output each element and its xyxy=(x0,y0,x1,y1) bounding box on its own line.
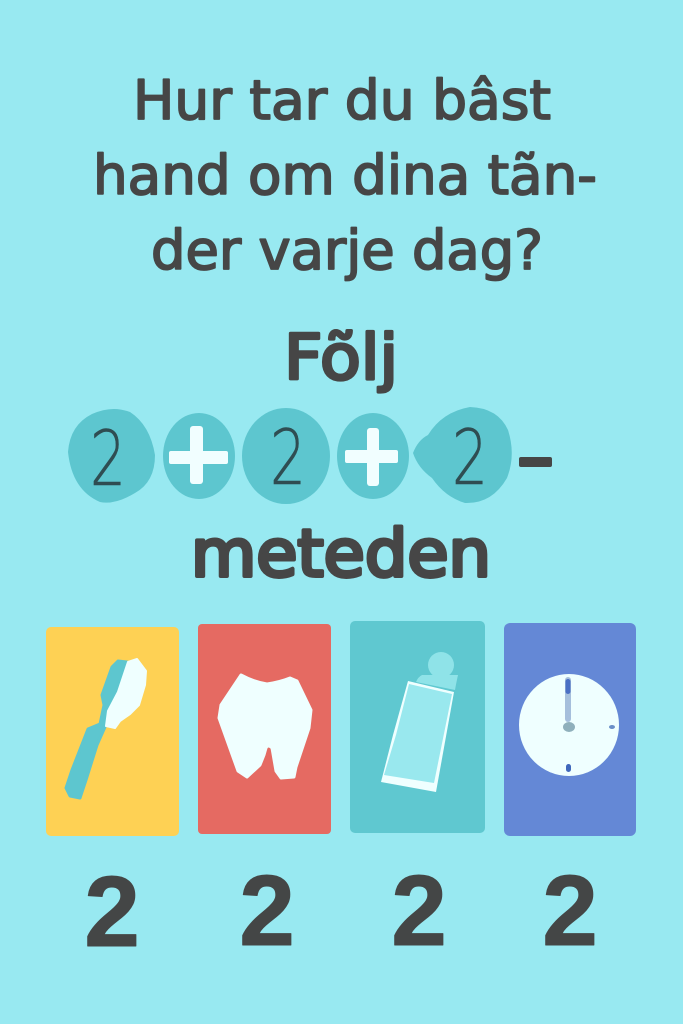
icon: tooth xyxy=(219,675,311,778)
circle: plus xyxy=(163,413,235,499)
title: hand om dina tãn- xyxy=(93,144,597,207)
numbers row: 2 xyxy=(239,855,295,967)
circle: 2 xyxy=(68,409,155,503)
circle: 2 xyxy=(242,408,330,504)
card: toothpaste xyxy=(350,621,485,833)
icon: toothbrush xyxy=(66,659,146,798)
dash xyxy=(519,457,552,467)
formula: 2+2+2 xyxy=(68,407,552,504)
icon: clock xyxy=(519,674,619,776)
title: Hur tar du bâst xyxy=(133,69,551,132)
title xyxy=(93,69,597,282)
heading: Följ: Fõlj xyxy=(284,321,398,394)
circle: plus xyxy=(337,413,409,499)
icon: toothpaste tube xyxy=(381,652,458,792)
circle: 2: 2 xyxy=(452,413,488,502)
numbers row xyxy=(84,855,598,968)
card: clock xyxy=(504,623,636,836)
heading: meteden: meteden xyxy=(191,517,491,592)
circle: 2: 2 xyxy=(90,414,126,503)
card: tooth xyxy=(198,624,331,834)
numbers row: 2 xyxy=(84,856,140,968)
numbers row: 2 xyxy=(391,855,447,967)
title: der varje dag? xyxy=(151,219,543,282)
circle: 2 xyxy=(413,407,512,503)
numbers row: 2 xyxy=(542,855,598,967)
card: toothbrush xyxy=(46,627,179,836)
circle: 2: 2 xyxy=(270,413,306,502)
